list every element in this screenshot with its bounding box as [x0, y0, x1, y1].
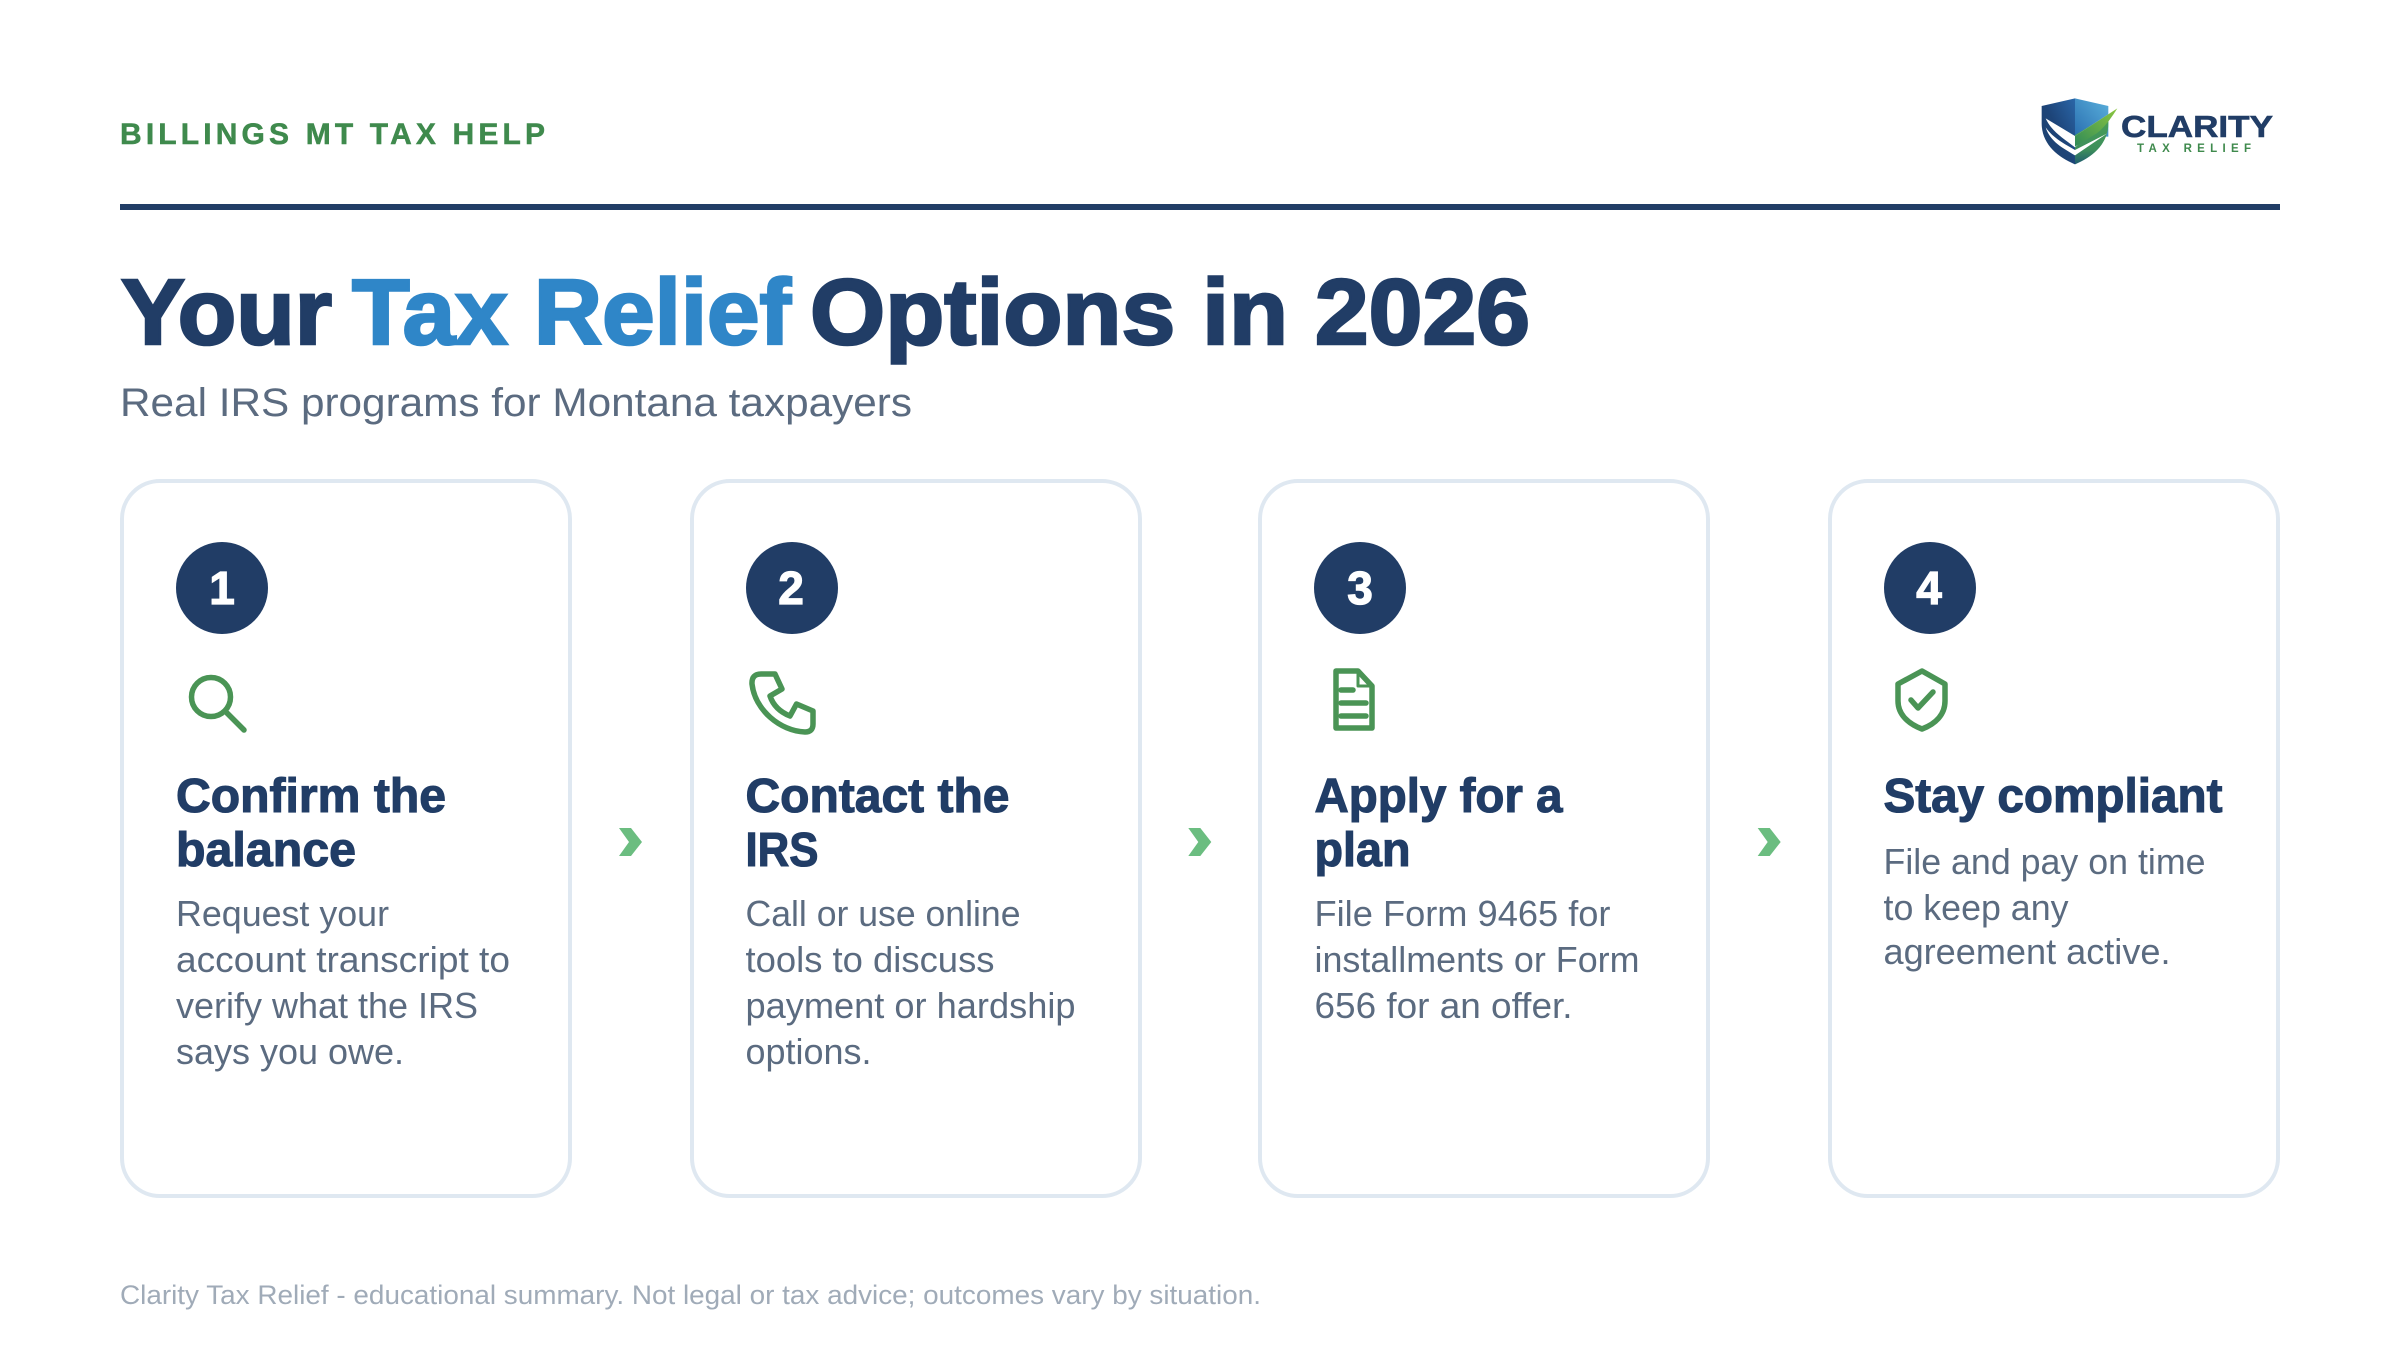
step number 4 [1884, 542, 1976, 634]
step number 3 [1314, 542, 1406, 634]
logo tagline: TAX RELIEF [2137, 143, 2251, 155]
icon: document [1336, 671, 1372, 728]
step number 4: 4 [1916, 562, 1942, 614]
step 1 description [176, 893, 510, 1072]
step 2 heading [746, 770, 1010, 877]
panel: step 1 card [122, 481, 570, 1196]
footer disclaimer: Clarity Tax Relief - educational summary. Not legal or tax advice; outcomes vary by situation. [120, 1280, 1261, 1310]
logo: Clarity Tax Relief [2042, 98, 2273, 164]
main title: Tax Relief [352, 260, 792, 364]
step 2 description: payment or hardship [746, 985, 1076, 1026]
step 1 heading: balance [176, 824, 356, 877]
icon: shield with check [1898, 671, 1945, 729]
step number 3: 3 [1347, 562, 1373, 614]
step 3 description: installments or Form [1314, 939, 1640, 980]
step 4 description: File and pay on time [1884, 841, 2206, 882]
panel: step 2 card [692, 481, 1140, 1196]
logo wordmark: CLARITY [2121, 109, 2273, 144]
step 3 description: File Form 9465 for [1314, 893, 1611, 934]
main title: Options in 2026 [810, 260, 1530, 364]
panel: step 3 card [1260, 481, 1708, 1196]
eyebrow heading: BILLINGS MT TAX HELP [120, 118, 545, 151]
step 1 description: verify what the IRS [176, 985, 478, 1026]
step 4 description: to keep any [1884, 887, 2068, 928]
step 2 heading: IRS [746, 824, 818, 877]
subtitle: Real IRS programs for Montana taxpayers [120, 381, 912, 425]
step 3 heading: Apply for a [1314, 770, 1563, 823]
step number 2 [746, 542, 838, 634]
icon: magnifying glass [192, 678, 244, 730]
step 2 description: tools to discuss [746, 939, 994, 980]
step 1 description: account transcript to [176, 939, 510, 980]
step number 1 [176, 542, 268, 634]
step 4 heading: Stay compliant [1884, 770, 2223, 823]
arrow: step 1 to 2 [619, 828, 642, 856]
step number 1: 1 [209, 562, 235, 614]
step 1 description: says you owe. [176, 1031, 404, 1072]
step 1 description: Request your [176, 893, 389, 934]
step 4 description: agreement active. [1884, 931, 2170, 972]
step 2 description: Call or use online [746, 893, 1020, 934]
step 3 description: 656 for an offer. [1314, 985, 1572, 1026]
step 3 description [1314, 893, 1640, 1026]
panel: step 4 card [1830, 481, 2278, 1196]
arrow: step 3 to 4 [1758, 828, 1781, 856]
icon: telephone [752, 674, 813, 732]
main title: Your [121, 260, 332, 364]
step 3 heading [1314, 770, 1563, 877]
step 4 description [1884, 841, 2206, 972]
step 3 heading: plan [1314, 824, 1410, 877]
step 2 heading: Contact the [746, 770, 1010, 823]
step number 2: 2 [778, 562, 804, 614]
step 1 heading: Confirm the [176, 770, 446, 823]
step 1 heading [176, 770, 446, 877]
arrow: step 2 to 3 [1188, 828, 1211, 856]
step 2 description: options. [746, 1031, 872, 1072]
logo shield mark [2042, 98, 2117, 164]
step 2 description [746, 893, 1076, 1072]
